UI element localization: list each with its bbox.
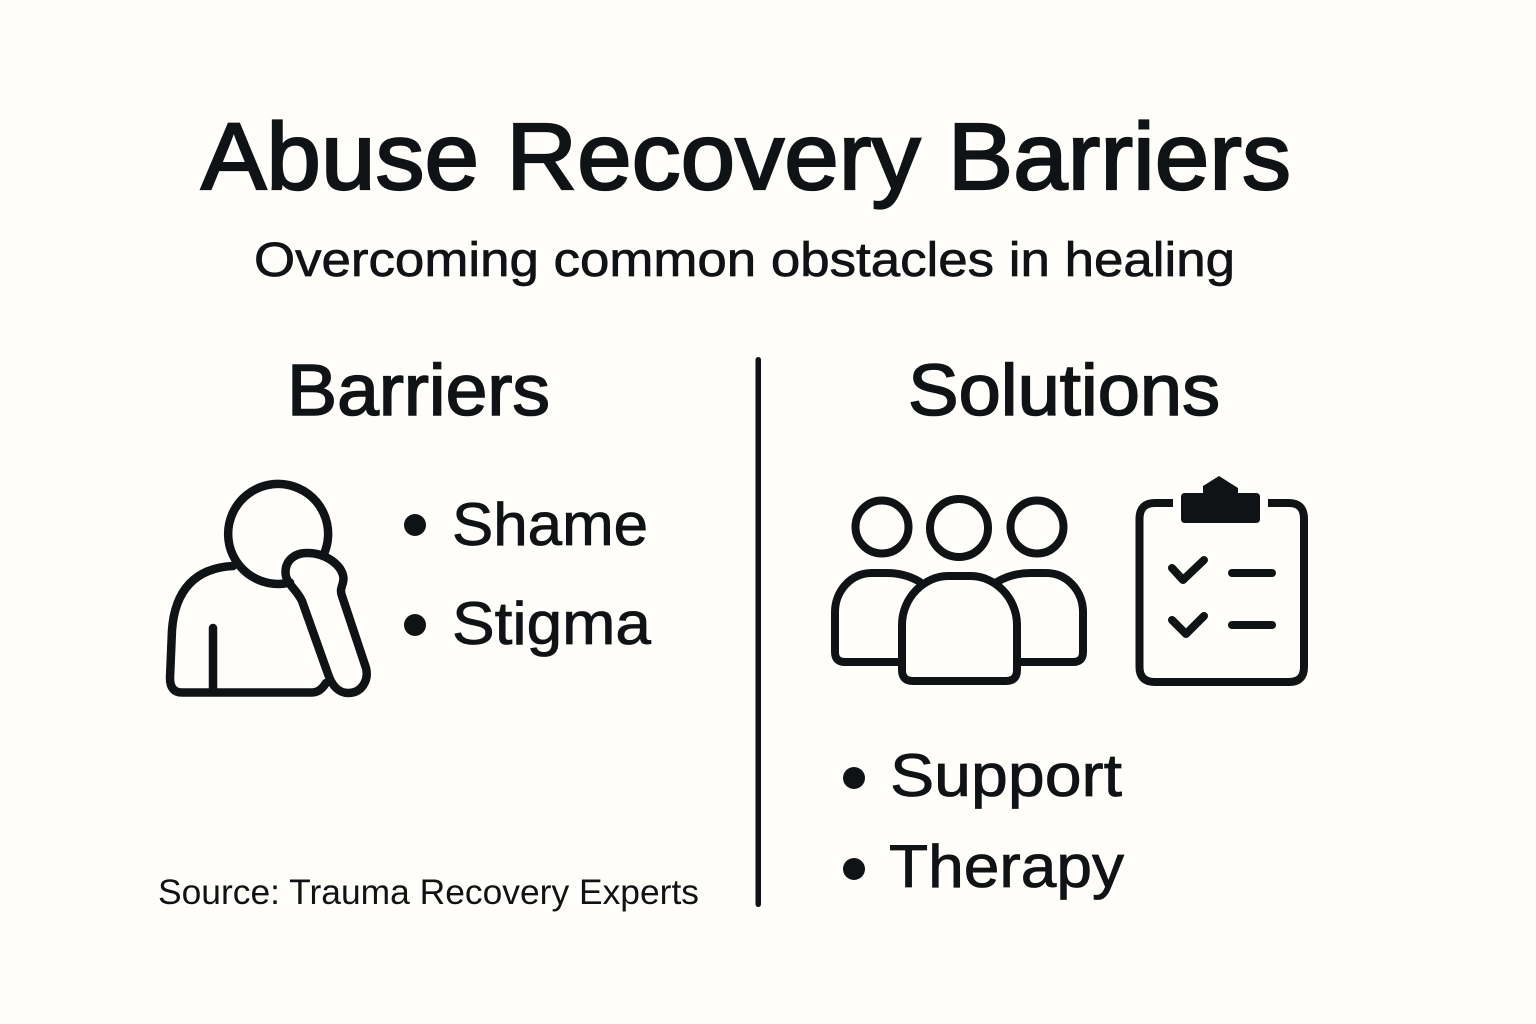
icon: group of people xyxy=(835,499,1083,681)
center divider xyxy=(756,357,761,907)
subtitle: Overcoming common obstacles in healing xyxy=(254,234,1235,287)
item: support: Support xyxy=(890,742,1122,809)
bullet: therapy xyxy=(843,858,865,880)
item: stigma: Stigma xyxy=(452,590,652,657)
icon: clipboard checklist xyxy=(1140,476,1304,682)
icon: person with head in hand xyxy=(170,484,367,693)
source note: Source: Trauma Recovery Experts xyxy=(158,873,699,912)
panel: barriers xyxy=(170,351,652,693)
panel: solutions xyxy=(835,351,1304,900)
list: barriers xyxy=(404,491,652,657)
bullet: shame xyxy=(404,514,426,536)
bullet: support xyxy=(843,767,865,789)
item: shame: Shame xyxy=(452,491,648,558)
title: Abuse Recovery Barriers xyxy=(201,104,1291,210)
heading: solutions: Solutions xyxy=(908,351,1220,431)
item: therapy: Therapy xyxy=(889,833,1124,900)
bullet: stigma xyxy=(404,614,426,636)
list: solutions xyxy=(843,742,1124,900)
heading: barriers: Barriers xyxy=(287,351,550,431)
